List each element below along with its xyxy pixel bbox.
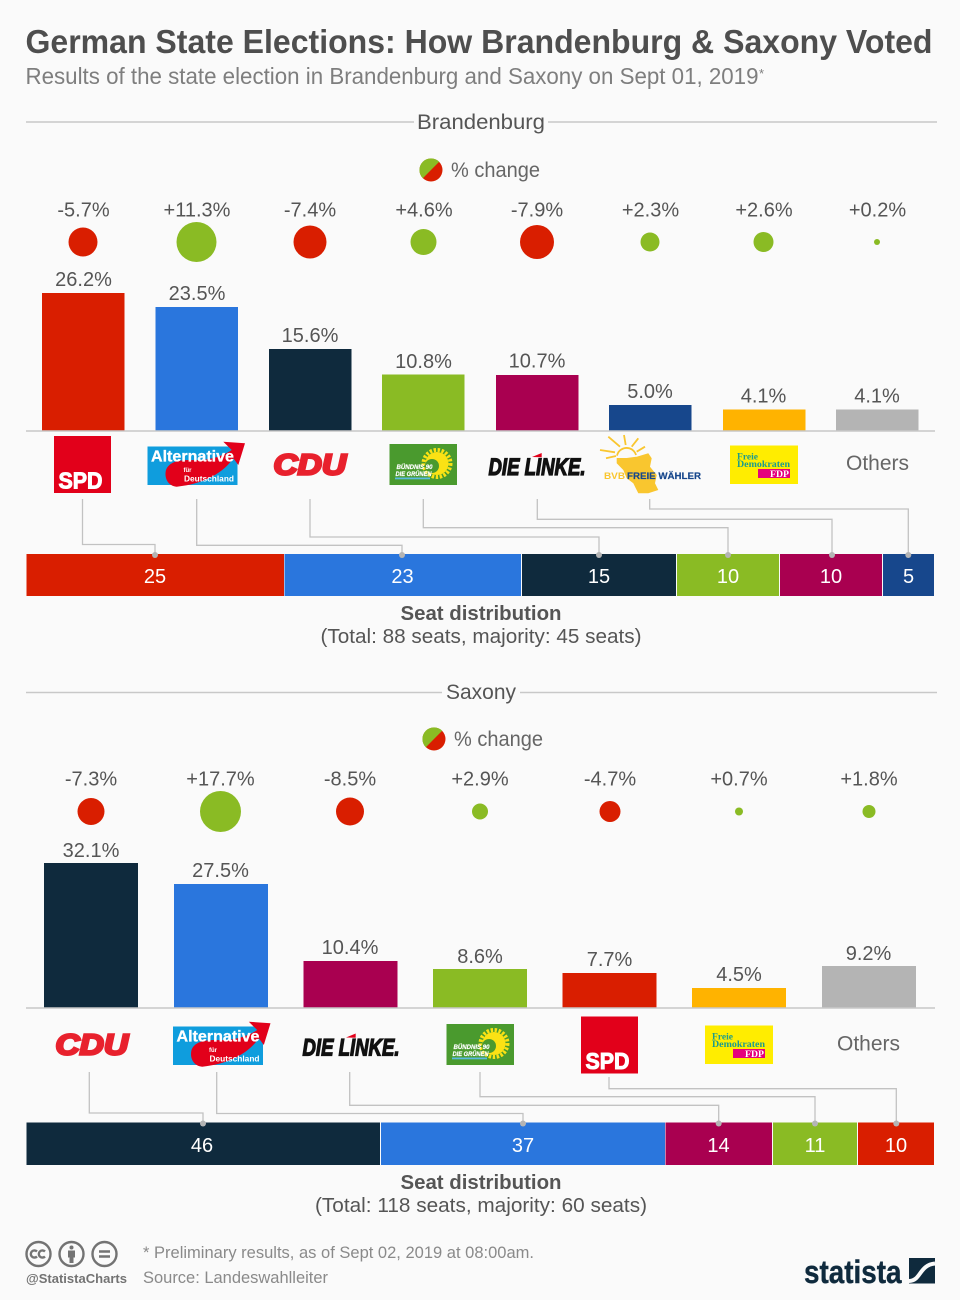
logo: statista: statista: [804, 1254, 902, 1290]
percentage change row: -4.7%: [584, 768, 636, 790]
panel: Brandenburg: [26, 111, 937, 648]
logo: Greens: [390, 444, 457, 485]
footer: license icons: [26, 1242, 116, 1266]
seat distribution bar: 10: [820, 566, 842, 588]
logo: Die Linke: [302, 1034, 400, 1062]
logo: CDU: [274, 450, 347, 482]
seat distribution bar: 5: [903, 566, 914, 588]
legend: % change: % change: [451, 159, 540, 182]
percentage change row: [57, 200, 906, 222]
legend: % change: [419, 158, 540, 182]
bar chart: vote share: 10.7%: [509, 350, 566, 372]
seat distribution caption: [315, 1171, 647, 1217]
change circles: [78, 791, 876, 832]
connector lines: [82, 499, 908, 554]
legend: % change: [422, 727, 543, 751]
seat distribution bar: 25: [144, 566, 166, 588]
label: Others: Others: [846, 452, 909, 475]
bar chart: vote share: [26, 269, 935, 431]
logo: Die Linke: [488, 453, 586, 481]
percentage change row: +17.7%: [186, 768, 255, 790]
change circles: [68, 222, 880, 262]
seat distribution caption: [320, 602, 642, 648]
bar chart: vote share: 27.5%: [192, 860, 249, 882]
seat distribution bar: 10: [885, 1135, 907, 1157]
bar chart: vote share: 5.0%: [627, 381, 673, 403]
logo: FDP: [705, 1026, 773, 1064]
logo: SPD: [54, 436, 111, 493]
percentage change row: +2.3%: [622, 200, 679, 222]
logo: BVB Freie Wähler: [600, 435, 701, 493]
bar chart: vote share: 10.8%: [395, 351, 452, 373]
seat distribution bar: 46: [191, 1135, 213, 1157]
percentage change row: -7.9%: [511, 200, 563, 222]
bar chart: vote share: 23.5%: [169, 283, 226, 305]
percentage change row: +0.2%: [849, 200, 906, 222]
seat distribution bar: 10: [717, 566, 739, 588]
logo: AfD: [148, 442, 245, 487]
logo: BVB Freie Wähler: BVB: [604, 471, 625, 482]
logo: CDU: [56, 1030, 129, 1062]
subtitle: Results of the state election in Brandenburg and Saxony on Sept 01, 2019: [26, 63, 758, 89]
seat distribution bar: 15: [588, 566, 610, 588]
logo: BVB Freie Wähler: FREIE WÄHLER: [627, 471, 701, 482]
bar chart: vote share: 8.6%: [457, 946, 503, 968]
bar chart: vote share: 4.1%: [854, 386, 900, 408]
logo: AfD: [173, 1022, 270, 1067]
bar chart: vote share: 10.4%: [322, 937, 379, 959]
logo: SPD: [581, 1016, 638, 1074]
percentage change row: +4.6%: [395, 200, 453, 222]
legend: % change: % change: [454, 728, 543, 751]
percentage change row: [65, 768, 898, 790]
percentage change row: +0.7%: [710, 768, 768, 790]
footer: handle: @StatistaCharts: [26, 1272, 127, 1286]
bar chart: vote share: 4.1%: [741, 386, 787, 408]
label: Others: Others: [837, 1032, 900, 1056]
percentage change row: +11.3%: [164, 200, 231, 222]
subtitle: *: [759, 66, 764, 81]
percentage change row: -7.4%: [284, 200, 336, 222]
bar chart: vote share: 7.7%: [587, 949, 633, 971]
logo: Greens: [446, 1024, 514, 1065]
seat distribution bar: 37: [512, 1135, 534, 1157]
seat distribution caption: Seat distribution: [400, 1171, 562, 1194]
bar chart: vote share: 15.6%: [282, 325, 339, 347]
seat distribution bar: 14: [707, 1135, 730, 1157]
percentage change row: +2.9%: [451, 768, 509, 790]
party logos: [56, 1016, 900, 1074]
bar chart: vote share: 26.2%: [55, 269, 112, 291]
footer: source: Source: Landeswahlleiter: [143, 1269, 329, 1287]
percentage change row: +2.6%: [735, 200, 793, 222]
seat distribution bar: 11: [805, 1135, 825, 1157]
bar chart: vote share: 4.5%: [716, 964, 762, 986]
bar chart: vote share: [26, 840, 935, 1008]
bar chart: vote share: 9.2%: [846, 943, 892, 965]
percentage change row: -8.5%: [324, 768, 376, 790]
title: German State Elections: How Brandenburg & Saxony Voted: [26, 24, 932, 61]
seat distribution caption: (Total: 88 seats, majority: 45 seats): [320, 626, 642, 648]
heading: Brandenburg: Brandenburg: [417, 111, 545, 134]
heading: Saxony: Saxony: [446, 681, 516, 704]
party logos: [54, 435, 909, 493]
logo: FDP: [730, 446, 798, 484]
percentage change row: -7.3%: [65, 768, 117, 790]
seat distribution bar: [26, 552, 934, 596]
connector lines: [89, 1072, 896, 1122]
percentage change row: -5.7%: [57, 200, 110, 222]
seat distribution caption: (Total: 118 seats, majority: 60 seats): [315, 1195, 647, 1217]
footer: notes: * Preliminary results, as of Sept 02, 2019 at 08:00am.: [143, 1244, 534, 1262]
seat distribution bar: 23: [391, 566, 414, 588]
bar chart: vote share: 32.1%: [63, 840, 120, 862]
percentage change row: +1.8%: [840, 768, 898, 790]
panel: Saxony: [26, 681, 937, 1217]
seat distribution bar: [26, 1120, 934, 1165]
seat distribution caption: Seat distribution: [400, 602, 562, 625]
